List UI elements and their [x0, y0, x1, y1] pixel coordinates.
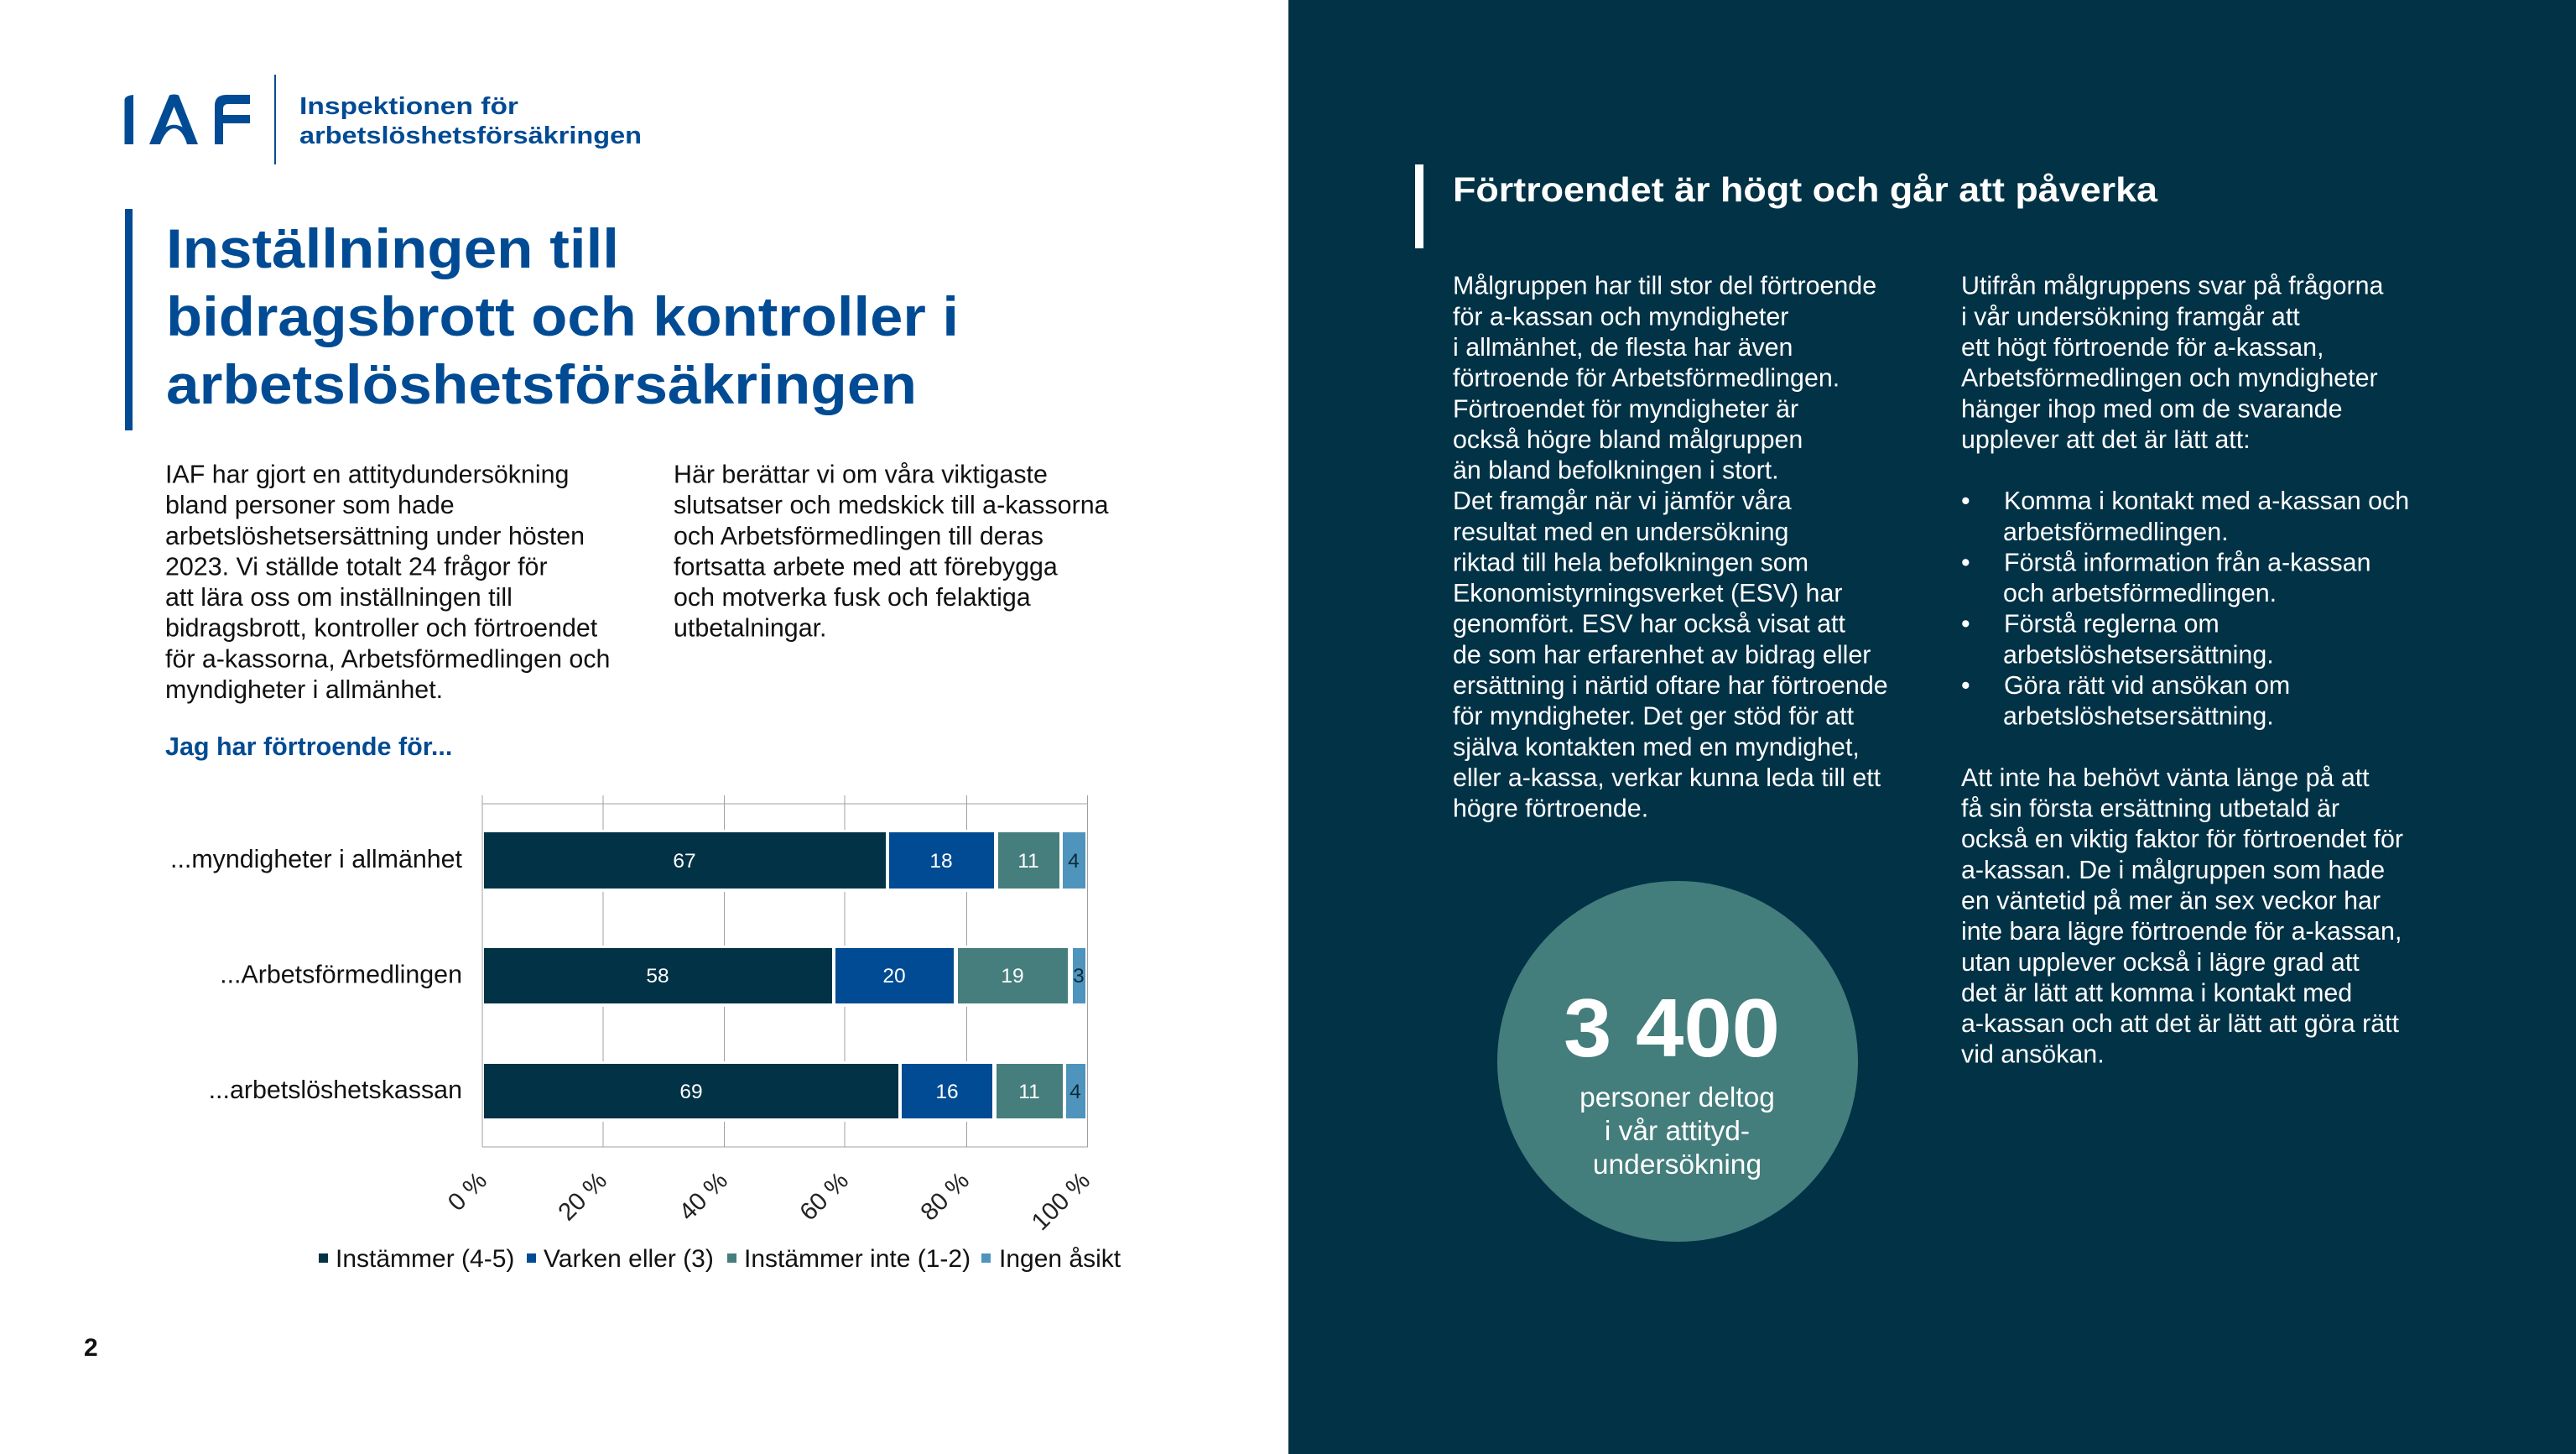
bullet list: Göra rätt vid ansökan om	[2004, 671, 2290, 700]
text block: right panel second column closing: också en viktig faktor för förtroendet för	[1961, 825, 2403, 853]
text block: right panel first column: Förtroendet för myndigheter är	[1453, 394, 1798, 423]
text block: intro right column: slutsatser och medskick till a-kassorna	[674, 491, 1109, 519]
logo text: Inspektionen för	[299, 93, 518, 120]
category labels: ...arbetslöshetskassan	[209, 1076, 462, 1104]
legend: Varken eller (3)	[544, 1245, 714, 1273]
bar: Arbetsförmedlingen: 20	[882, 965, 906, 988]
text block: right panel first column: Ekonomistyrningsverket (ESV) har	[1453, 579, 1842, 607]
bar: Arbetsförmedlingen	[484, 948, 1085, 1003]
axis labels: 40 %	[674, 1167, 733, 1227]
text block: intro left column: arbetslöshetsersättning under hösten	[165, 522, 585, 550]
icon: IAF wordmark	[124, 94, 250, 144]
text block: right panel first column: genomfört. ESV har också visat att	[1453, 610, 1845, 638]
text block: right panel first column	[1453, 272, 1888, 823]
text block: right panel second column closing: a-kassan och att det är lätt att göra rätt	[1961, 1009, 2400, 1038]
logo text	[299, 93, 642, 149]
bar: myndigheter i allmänhet: 4	[1068, 850, 1080, 873]
bullet list: Förstå reglerna om	[2004, 610, 2220, 638]
callout: 3 400 participants circle	[1497, 881, 1858, 1242]
text block: right panel first column: riktad till hela befolkningen som	[1453, 548, 1808, 576]
bar: arbetslöshetskassan: 69	[679, 1081, 703, 1103]
text block: right panel second column intro: Utifrån målgruppens svar på frågorna	[1961, 272, 2383, 300]
bullet list	[1961, 487, 2409, 731]
bar: myndigheter i allmänhet: 11	[1017, 850, 1039, 873]
bar: Arbetsförmedlingen: 58	[646, 965, 669, 988]
heading: right panel with accent bar: Förtroendet är högt och går att påverka	[1453, 170, 2158, 209]
category labels: ...myndigheter i allmänhet	[170, 845, 463, 873]
bullet list: arbetsförmedlingen.	[2003, 518, 2229, 546]
bar: arbetslöshetskassan: 16	[935, 1081, 959, 1103]
heading: right panel with accent bar	[1415, 164, 2158, 248]
text block: intro right column: utbetalningar.	[674, 614, 827, 643]
axis labels: 0 %	[443, 1167, 492, 1217]
bullet list: •	[1961, 610, 1970, 638]
text block: right panel first column: resultat med en undersökning	[1453, 518, 1788, 546]
text block: intro left column: IAF har gjort en attitydundersökning	[165, 460, 569, 488]
axis labels: 100 %	[1026, 1167, 1095, 1236]
page number: 2	[84, 1334, 98, 1362]
title: main heading with accent bar	[125, 209, 959, 430]
text block: right panel first column: i allmänhet, de flesta har även	[1453, 333, 1793, 362]
text block: right panel second column intro	[1961, 272, 2383, 454]
text block: intro right column: och motverka fusk och felaktiga	[674, 583, 1031, 612]
text block: right panel first column: också högre bland målgruppen	[1453, 425, 1803, 454]
bar: Arbetsförmedlingen: 3	[1073, 965, 1085, 988]
text block: right panel second column closing: utan upplever också i lägre grad att	[1961, 948, 2360, 977]
bar: arbetslöshetskassan	[484, 1064, 1085, 1118]
logo text: arbetslöshetsförsäkringen	[299, 122, 642, 149]
text block: right panel second column closing: det är lätt att komma i kontakt med	[1961, 978, 2352, 1007]
bullet list: •	[1961, 671, 1970, 700]
title: main heading with accent bar: arbetslöshetsförsäkringen	[166, 353, 917, 415]
panel: dark right background	[1288, 0, 2576, 1454]
text block: right panel second column closing: inte bara lägre förtroende för a-kassan,	[1961, 917, 2402, 946]
axis labels: 20 %	[553, 1167, 612, 1227]
text block: right panel first column: förtroende för Arbetsförmedlingen.	[1453, 364, 1840, 393]
callout: 3 400 participants circle: personer deltog	[1579, 1082, 1775, 1113]
text block: right panel first column: ersättning i närtid oftare har förtroende	[1453, 671, 1888, 700]
text block: intro right column	[674, 460, 1109, 643]
bar: arbetslöshetskassan: 4	[1069, 1081, 1081, 1103]
text block: right panel first column: eller a-kassa, verkar kunna leda till ett	[1453, 763, 1881, 792]
bullet list: •	[1961, 487, 1970, 515]
text block: right panel second column intro: ett högt förtroende för a-kassan,	[1961, 333, 2324, 362]
chart heading: Jag har förtroende för...	[165, 732, 452, 761]
text block: right panel first column: Det framgår när vi jämför våra	[1453, 487, 1792, 515]
text block: right panel second column intro: hänger ihop med om de svarande	[1961, 394, 2342, 423]
category labels: ...Arbetsförmedlingen	[220, 960, 462, 988]
bullet list: Förstå information från a-kassan	[2004, 548, 2370, 576]
bullet list: arbetslöshetsersättning.	[2003, 640, 2274, 669]
callout: 3 400 participants circle: 3 400	[1564, 982, 1780, 1074]
text block: right panel second column intro: Arbetsförmedlingen och myndigheter	[1961, 364, 2378, 393]
bullet list: •	[1961, 548, 1970, 576]
bullet list: och arbetsförmedlingen.	[2003, 579, 2277, 607]
text block: right panel second column closing: Att inte ha behövt vänta länge på att	[1961, 763, 2370, 792]
bar: Arbetsförmedlingen: 19	[1001, 965, 1024, 988]
text block: intro right column: fortsatta arbete med att förebygga	[674, 552, 1058, 581]
text block: intro left column: bidragsbrott, kontroller och förtroendet	[165, 614, 598, 643]
title: main heading with accent bar: Inställningen till	[166, 217, 619, 279]
bullet list: arbetslöshetsersättning.	[2003, 702, 2274, 731]
text block: right panel second column closing: vid ansökan.	[1961, 1040, 2105, 1069]
logo: IAF Inspektionen för arbetslöshetsförsäkringen	[124, 75, 642, 164]
legend: Ingen åsikt	[999, 1245, 1121, 1273]
title: main heading with accent bar: bidragsbrott och kontroller i	[166, 285, 959, 347]
bullet list: Komma i kontakt med a-kassan och	[2004, 487, 2409, 515]
text block: intro left column	[165, 460, 610, 704]
text block: intro left column: myndigheter i allmänhet.	[165, 675, 443, 704]
text block: right panel first column: högre förtroende.	[1453, 795, 1648, 823]
text block: intro left column: att lära oss om inställningen till	[165, 583, 513, 612]
text block: right panel first column: Målgruppen har till stor del förtroende	[1453, 272, 1876, 300]
bar: arbetslöshetskassan: 11	[1018, 1081, 1040, 1103]
text block: right panel first column: för a-kassan och myndigheter	[1453, 302, 1788, 331]
text block: intro left column: 2023. Vi ställde totalt 24 frågor för	[165, 552, 548, 581]
text block: right panel second column closing: a-kassan. De i målgruppen som hade	[1961, 856, 2385, 884]
chart grid	[482, 795, 1088, 1147]
text block: right panel second column closing: få sin första ersättning utbetald är	[1961, 795, 2339, 823]
callout: 3 400 participants circle: undersökning	[1593, 1149, 1762, 1180]
text block: right panel first column: för myndigheter. Det ger stöd för att	[1453, 702, 1855, 731]
text block: intro right column: Här berättar vi om våra viktigaste	[674, 460, 1048, 488]
text block: right panel second column closing	[1961, 763, 2403, 1069]
legend: Instämmer (4-5)	[336, 1245, 514, 1273]
bar chart: stacked trust bars	[170, 795, 1095, 1236]
bar: myndigheter i allmänhet: 67	[673, 850, 696, 873]
text block: intro right column: och Arbetsförmedlingen till deras	[674, 522, 1043, 550]
legend	[319, 1245, 1121, 1273]
bar: myndigheter i allmänhet: 18	[929, 850, 953, 873]
callout: 3 400 participants circle: i vår attityd-	[1605, 1116, 1750, 1147]
legend: Instämmer inte (1-2)	[744, 1245, 971, 1273]
category labels	[170, 845, 463, 1104]
axis labels: 60 %	[794, 1167, 854, 1227]
bar: myndigheter i allmänhet	[484, 832, 1085, 889]
axis labels	[443, 1167, 1095, 1236]
axis labels: 80 %	[915, 1167, 975, 1227]
text block: right panel second column intro: upplever att det är lätt att:	[1961, 425, 2251, 454]
text block: intro left column: bland personer som hade	[165, 491, 455, 519]
text block: right panel first column: själva kontakten med en myndighet,	[1453, 732, 1860, 761]
text block: right panel second column intro: i vår undersökning framgår att	[1961, 302, 2300, 331]
text block: intro left column: för a-kassorna, Arbetsförmedlingen och	[165, 644, 610, 673]
bar gaps	[483, 830, 1087, 1122]
text block: right panel first column: än bland befolkningen i stort.	[1453, 456, 1779, 484]
text block: right panel first column: de som har erfarenhet av bidrag eller	[1453, 640, 1871, 669]
text block: right panel second column closing: en väntetid på mer än sex veckor har	[1961, 887, 2381, 915]
